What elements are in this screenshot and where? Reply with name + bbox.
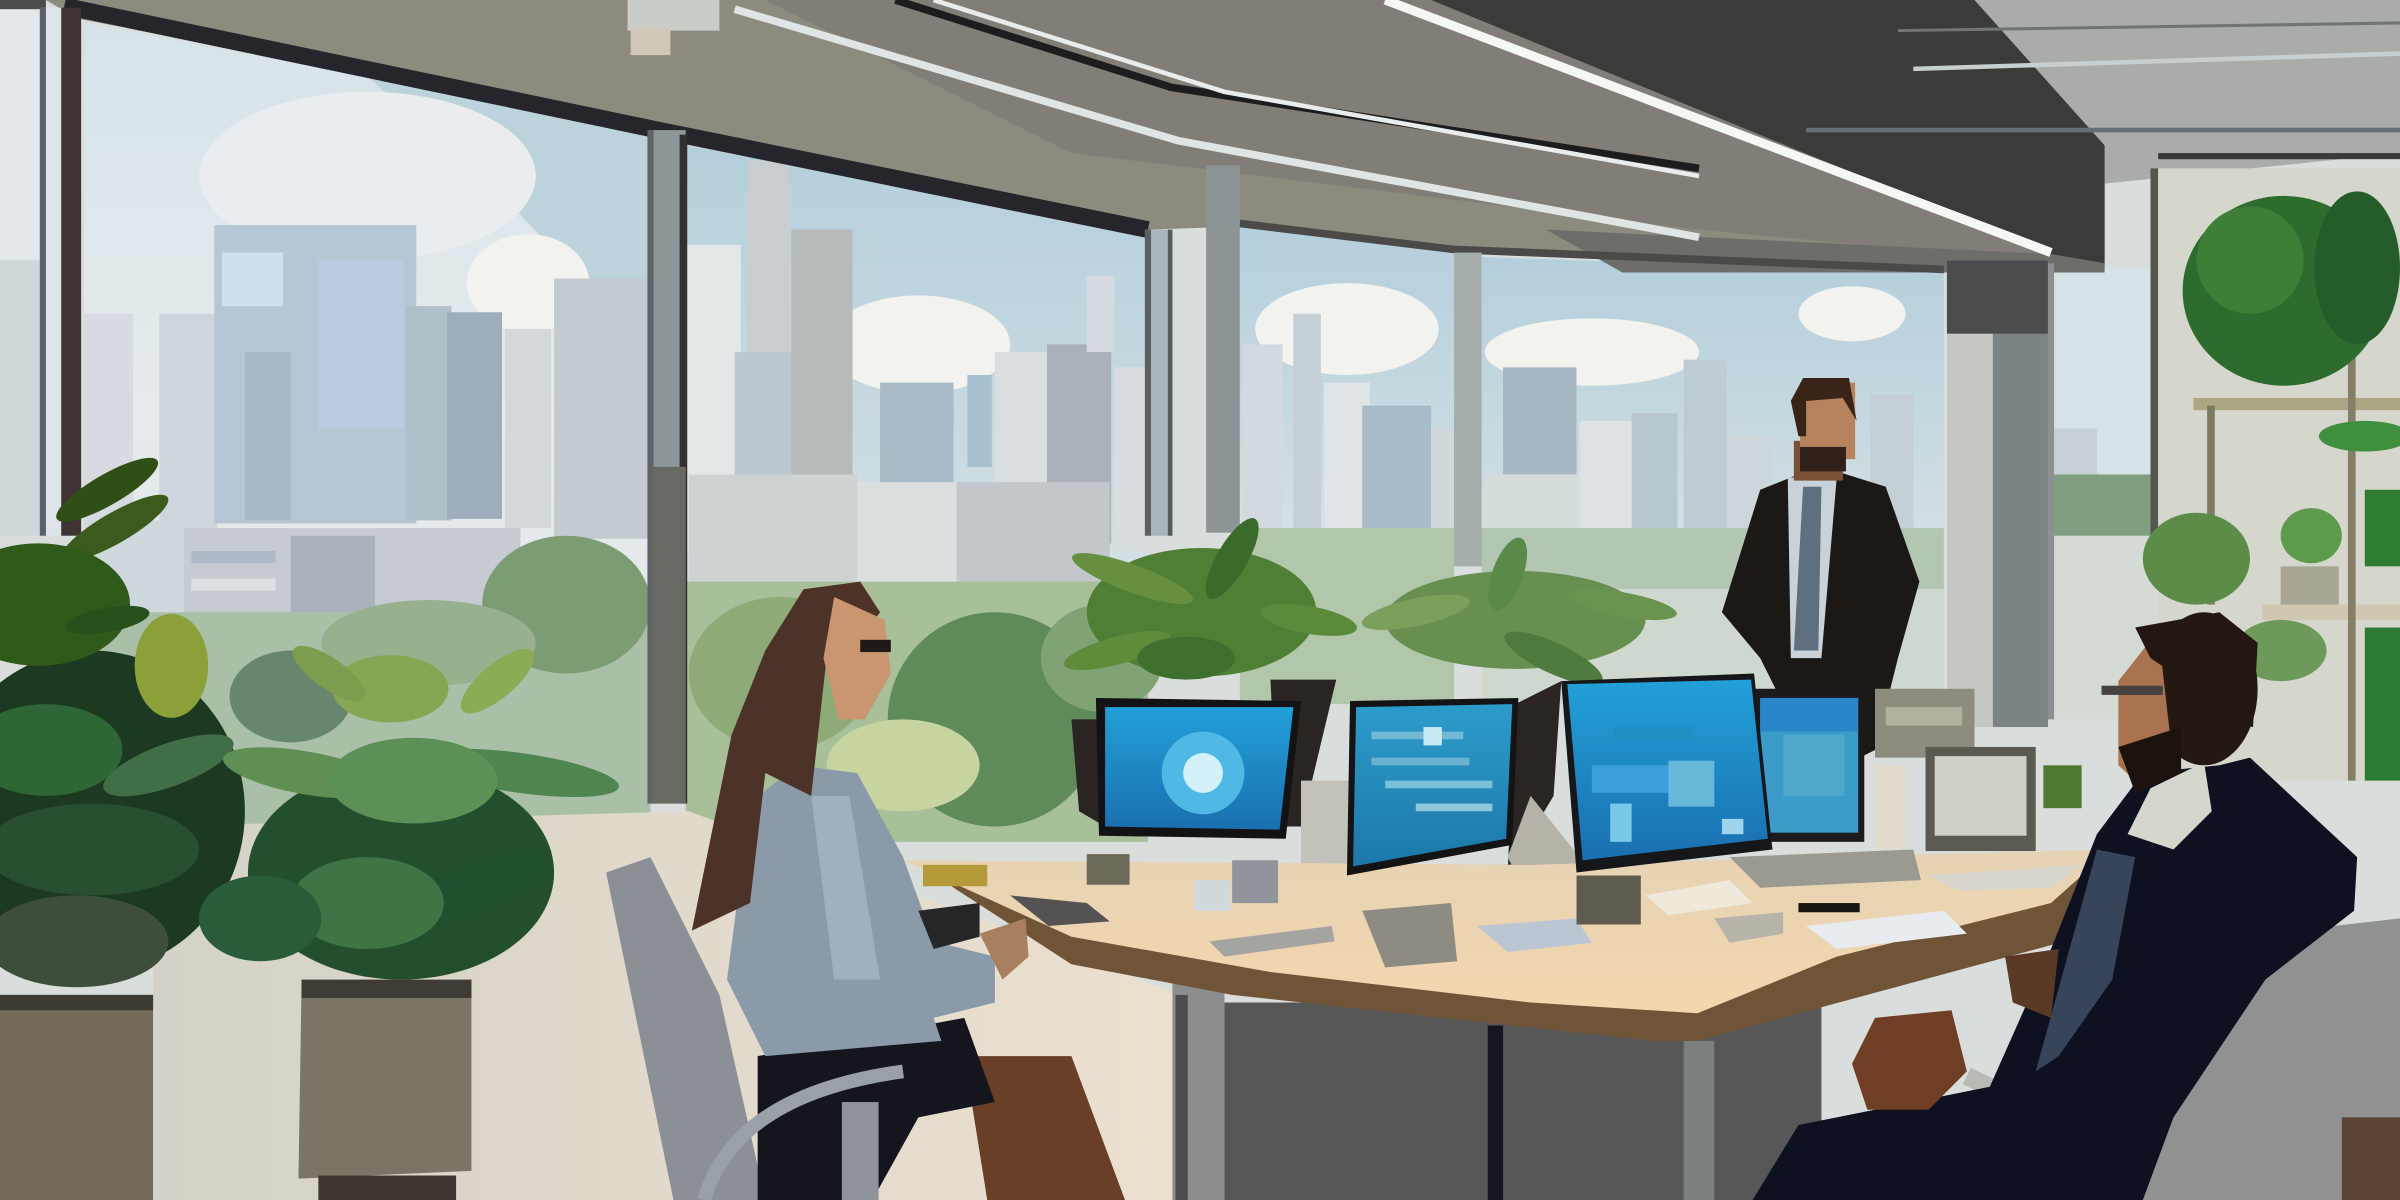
seated woman: [692, 582, 1125, 1200]
woman's chair: [606, 857, 765, 1200]
hanging and shelf plants: [2143, 191, 2400, 781]
ceiling: [0, 0, 2400, 272]
planter right: [298, 980, 471, 1200]
planter left: [0, 995, 153, 1200]
desk: [903, 849, 2111, 1200]
dark plant stands behind monitors: [1071, 680, 1561, 872]
low-rise building: [84, 520, 520, 628]
chair arm: [704, 1071, 903, 1200]
plant behind monitors right: [1359, 533, 1679, 695]
seated man: [1753, 612, 2357, 1200]
monitor left with logo: [1096, 698, 1301, 839]
standing man: [1722, 378, 1919, 765]
right floor plant: [199, 636, 622, 980]
monitor large centre right: [1561, 673, 1772, 872]
city skyline left windows: [0, 161, 1148, 597]
monitor far right: [1754, 689, 1864, 842]
plant behind monitors left: [1061, 511, 1359, 680]
monitor grey stands: [1301, 781, 1653, 918]
clouds: [199, 92, 1906, 393]
left large plant: [0, 447, 245, 987]
window frames and pillars: [0, 0, 2158, 804]
floor right: [2342, 1117, 2400, 1200]
back of desk clutter: [1875, 689, 2082, 851]
city skyline right windows: [1243, 314, 2097, 566]
right shelving: [2158, 153, 2400, 781]
trees outside: [84, 474, 2158, 842]
floor: [153, 811, 1179, 1200]
seated man's chair: [1967, 918, 2400, 1200]
monitor centre: [1347, 698, 1518, 876]
desk items: [923, 849, 2082, 967]
